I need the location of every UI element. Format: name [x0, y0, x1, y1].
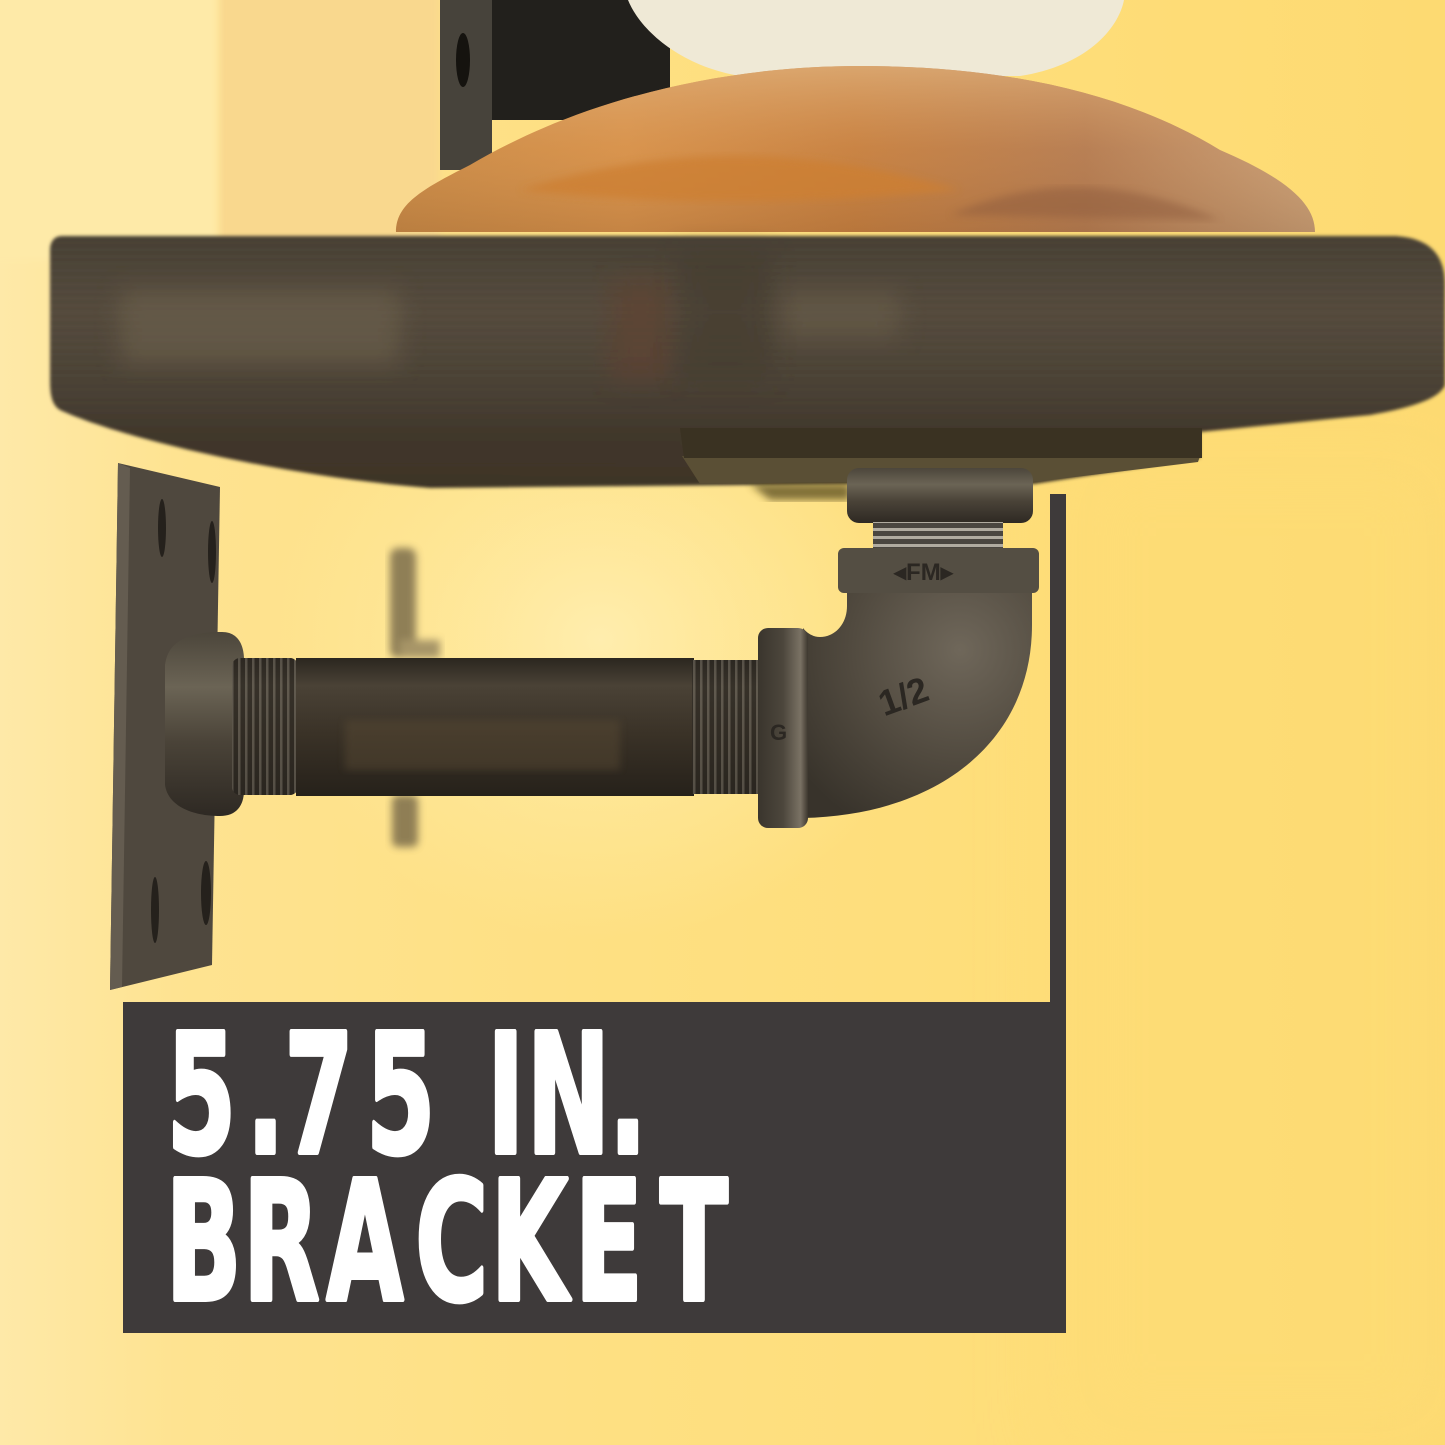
blurred background bracket: [390, 548, 440, 847]
elbow fitting: G: [770, 720, 787, 745]
mounting plate under shelf: [680, 428, 1202, 500]
shelf board: [50, 236, 1445, 488]
dimension line: [1050, 494, 1066, 1014]
label text: BRACKET: [166, 1147, 728, 1340]
label text: 5.75 IN.: [167, 1000, 647, 1193]
round wooden base: [396, 66, 1315, 232]
flange neck: [165, 632, 244, 816]
ceramic bowl: [628, 0, 1124, 76]
label panel: [123, 1000, 1066, 1340]
elbow fitting: ◂FM▸: [893, 559, 954, 586]
wall flange plate: [110, 463, 220, 990]
label text: [166, 1000, 728, 1340]
wall plate behind the shelf: [440, 0, 670, 170]
elbow fitting: 1/2: [873, 668, 934, 724]
threaded pipe: [232, 658, 760, 796]
elbow fitting: [758, 548, 1039, 828]
flange collar: [847, 468, 1033, 548]
